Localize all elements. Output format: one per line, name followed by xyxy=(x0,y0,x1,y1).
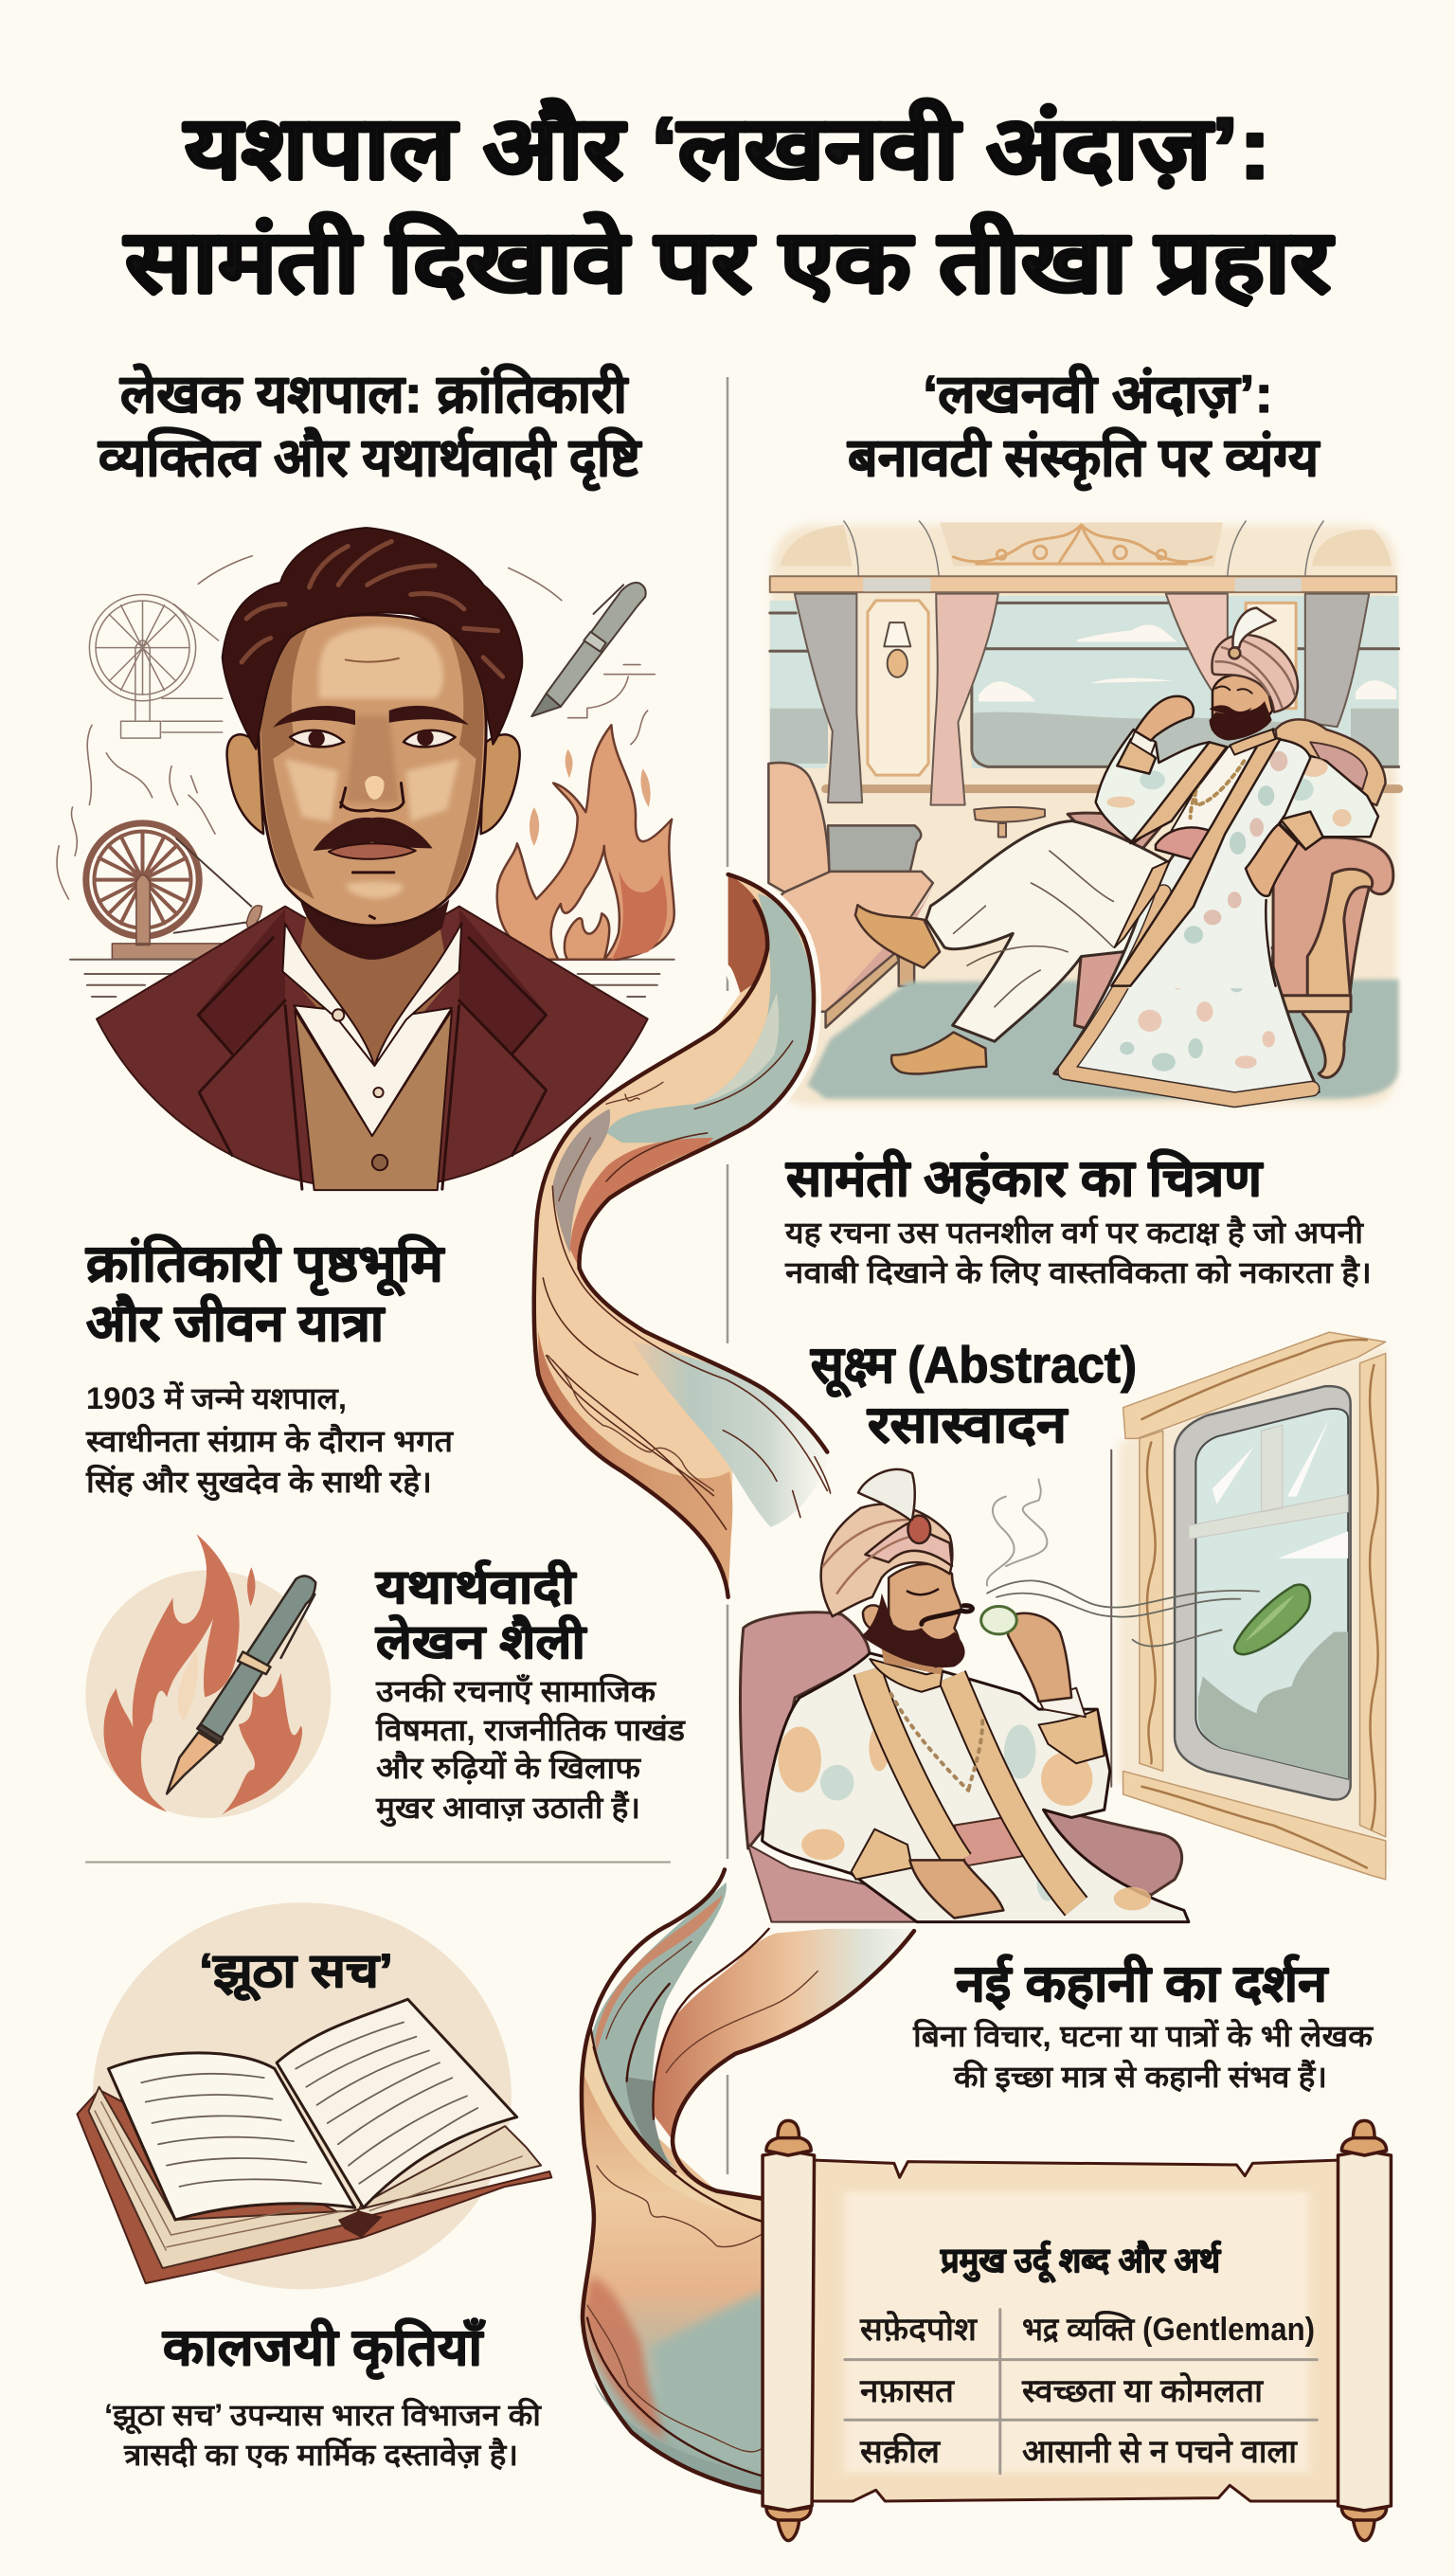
red lower arm stripe xyxy=(570,1138,713,1269)
table row 1 xyxy=(859,2310,1315,2348)
neck xyxy=(295,899,449,1073)
book cover xyxy=(77,2090,551,2283)
section: feudal ego: सामंती अहंकार का चित्रण xyxy=(785,1148,1264,1207)
section: revolutionary background: क्रांतिकारी पृष्ठभूमि xyxy=(85,1234,445,1296)
red strip xyxy=(595,1895,723,2051)
icon: line-art spinning wheel xyxy=(89,595,223,738)
chair crest xyxy=(1276,719,1386,805)
inside teal xyxy=(592,1882,727,2174)
side table xyxy=(974,807,1045,838)
section: abstract tasting heading xyxy=(810,1337,1137,1453)
left seat xyxy=(768,763,933,1028)
beige circle xyxy=(85,1570,331,1818)
raised hand xyxy=(1130,731,1156,755)
right roller xyxy=(1338,2120,1391,2541)
title xyxy=(123,99,1335,311)
curtains xyxy=(795,594,1369,805)
illustration: nawab upper body, turban and armrest hand xyxy=(1096,608,1386,988)
shoes xyxy=(855,905,986,1074)
ceiling arches xyxy=(844,521,1323,575)
section: realistic writing style: और रुढ़ियों के खिलाफ xyxy=(376,1750,641,1785)
section: revolutionary background xyxy=(85,1234,455,1502)
armchair xyxy=(1068,813,1393,1077)
left roller xyxy=(763,2120,815,2541)
section: revolutionary background: और जीवन यात्रा xyxy=(86,1293,386,1352)
neck xyxy=(879,1636,954,1674)
section: feudal ego: नवाबी दिखाने के लिए वास्तविकता को नकारता है। xyxy=(784,1254,1372,1289)
icon: pen xyxy=(531,583,646,716)
section: timeless works: ‘झूठा सच’ उपन्यास भारत विभाजन की xyxy=(104,2397,543,2435)
carriage wall xyxy=(1119,1345,1386,1867)
dark lower edge xyxy=(594,2382,780,2495)
section: revolutionary background: स्वाधीनता संग्राम के दौरान भगत xyxy=(85,1423,455,1458)
raised hand with cucumber slice xyxy=(1039,1688,1086,1717)
waistcoat xyxy=(295,1010,452,1190)
section: feudal ego xyxy=(784,1148,1372,1289)
luggage rail xyxy=(770,576,1396,592)
table row 2: स्वच्छता या कोमलता xyxy=(1021,2371,1264,2409)
red patch xyxy=(584,2279,666,2441)
heading: left column xyxy=(98,363,642,491)
chair armrest xyxy=(1025,1804,1182,1895)
window glass xyxy=(1175,1386,1351,1800)
section: realistic writing style: यथार्थवादी xyxy=(375,1559,577,1613)
ribbon body xyxy=(534,874,814,1597)
ribbon halo xyxy=(534,874,827,1597)
section: realistic writing style: विषमता, राजनीतिक पाखंड xyxy=(375,1712,686,1747)
face xyxy=(259,615,486,926)
illustration: nawab savouring the cucumber scent beside the window xyxy=(740,1332,1386,1922)
red brown fold xyxy=(728,874,766,993)
cucumber xyxy=(1234,1585,1310,1654)
lower hand xyxy=(909,1860,1003,1918)
ornament xyxy=(954,525,1212,564)
table row 1: भद्र व्यक्ति (Gentleman) xyxy=(1022,2310,1315,2348)
section: realistic writing style xyxy=(375,1559,686,1828)
section: revolutionary background: 1903 में जन्मे यशपाल, xyxy=(86,1380,347,1415)
shirt xyxy=(294,1005,452,1136)
label: Jhootha Sach: ‘झूठा सच’ xyxy=(199,1944,393,2001)
panel: Urdu glossary scroll xyxy=(763,2120,1391,2541)
heading: right column: बनावटी संस्कृति पर व्यंग्य xyxy=(847,426,1320,491)
teal sweep xyxy=(606,893,814,1143)
heading: left column: लेखक यशपाल: क्रांतिकारी xyxy=(119,363,630,423)
eyebrows xyxy=(273,706,469,728)
title: सामंती दिखावे पर एक तीखा प्रहार xyxy=(123,212,1335,311)
lower brown band xyxy=(538,1331,732,1597)
section: new story philosophy: बिना विचार, घटना या पात्रों के भी लेखक xyxy=(912,2018,1374,2053)
waist sash xyxy=(1156,827,1210,862)
section: abstract tasting heading: रसास्वादन xyxy=(867,1396,1069,1453)
section: new story philosophy xyxy=(912,1954,1374,2094)
text lines xyxy=(141,2022,477,2187)
section: realistic writing style: उनकी रचनाएँ सामाजिक xyxy=(375,1673,657,1708)
jacket xyxy=(97,907,648,1189)
wall lamp xyxy=(884,622,910,677)
hanging hand xyxy=(1246,824,1298,896)
rim xyxy=(582,2027,780,2223)
table row 3: आसानी से न पचने वाला xyxy=(1022,2432,1298,2470)
ribbon body xyxy=(580,2068,780,2495)
beard xyxy=(1210,701,1272,741)
beige circle xyxy=(93,1902,512,2289)
ribbon: flowing scroll upper segment xyxy=(534,874,831,1597)
turban xyxy=(821,1469,952,1616)
section: new story philosophy: की इच्छा मात्र से कहानी संभव हैं। xyxy=(953,2059,1327,2094)
parchment xyxy=(812,2160,1341,2501)
kurta front with necklace xyxy=(1172,739,1266,831)
ears xyxy=(227,734,520,834)
heading: right column: ‘लखनवी अंदाज़’: xyxy=(923,363,1273,423)
title: यशपाल और ‘लखनवी अंदाज़’: xyxy=(183,99,1271,197)
ribbon: flowing scroll lower segment xyxy=(580,1869,914,2495)
section: timeless works: त्रासदी का एक मार्मिक दस्तावेज़ है। xyxy=(123,2437,518,2472)
section: abstract tasting heading: सूक्ष्म (Abstract) xyxy=(810,1337,1137,1397)
floor xyxy=(807,980,1399,1099)
brocade coat xyxy=(763,1653,1189,1922)
illustration: portrait of Yashpal with charkha, pen and flame xyxy=(57,528,674,1190)
eyes xyxy=(290,730,456,747)
cuff and lapel xyxy=(1117,739,1323,850)
table row 1: सफ़ेदपोश xyxy=(859,2310,979,2348)
pen xyxy=(167,1576,315,1793)
left sleeve xyxy=(1096,730,1225,843)
illustration: pen and flame emblem xyxy=(85,1534,331,1818)
robe right edge line xyxy=(1266,900,1276,986)
teal tapered end xyxy=(632,1341,828,1527)
right arm of ribbon xyxy=(653,1929,914,2140)
ear xyxy=(863,1605,884,1631)
book spine xyxy=(338,2210,383,2238)
waist sash xyxy=(954,1815,1022,1865)
table row 3: सक़ील xyxy=(859,2432,942,2470)
scroll title: प्रमुख उर्दू शब्द और अर्थ xyxy=(940,2241,1222,2283)
trousers xyxy=(926,821,1173,1041)
section: revolutionary background: सिंह और सुखदेव के साथी रहे। xyxy=(85,1464,432,1502)
beard xyxy=(860,1594,965,1667)
turban xyxy=(1212,608,1298,712)
column divider xyxy=(727,377,728,2174)
table row 2: नफ़ासत xyxy=(859,2373,956,2409)
horizontal divider xyxy=(85,1861,671,1863)
outlines xyxy=(579,874,827,1452)
section: new story philosophy: नई कहानी का दर्शन xyxy=(955,1954,1329,2012)
windows xyxy=(972,596,1399,768)
necklace xyxy=(891,1694,982,1791)
face xyxy=(1212,675,1272,736)
section: timeless works: कालजयी कृतियाँ xyxy=(162,2317,486,2380)
flames xyxy=(103,1534,302,1815)
table row 3 xyxy=(859,2432,1298,2470)
section: timeless works xyxy=(104,2317,543,2472)
train wall xyxy=(771,525,1396,1106)
teal patch xyxy=(651,2288,774,2483)
table row 2 xyxy=(859,2371,1264,2409)
gold bands xyxy=(868,1670,1076,1906)
icon: wavy lines xyxy=(57,556,655,899)
outlines xyxy=(582,1869,780,2495)
moustache xyxy=(314,818,433,851)
window frame xyxy=(1123,1332,1386,1880)
purple shade xyxy=(552,1108,610,1253)
robe panel xyxy=(1127,739,1310,988)
hair xyxy=(223,528,522,749)
section: realistic writing style: मुखर आवाज़ उठाती हैं। xyxy=(375,1790,640,1828)
scent wisps xyxy=(987,1479,1047,1585)
heading: right column xyxy=(847,363,1320,491)
page block xyxy=(88,2087,541,2268)
ribbon halo xyxy=(582,1874,869,2495)
face xyxy=(889,1564,961,1666)
section: feudal ego: यह रचना उस पतनशील वर्ग पर कटाक्ष है जो अपनी xyxy=(784,1215,1365,1250)
gold robe border xyxy=(1111,736,1281,986)
pages xyxy=(108,2053,355,2220)
illustration: nawab lounging in train compartment xyxy=(768,521,1399,1106)
illustration: open book xyxy=(77,1902,551,2289)
heading: left column: व्यक्तित्व और यथार्थवादी दृष्टि xyxy=(98,426,642,491)
wall panel xyxy=(868,601,928,775)
robe with floral pattern xyxy=(1054,730,1333,1106)
table lines xyxy=(845,2310,1317,2474)
icon: brown spinning wheel xyxy=(86,823,251,936)
icon: flame xyxy=(497,725,674,960)
collar xyxy=(1230,730,1276,755)
chair back xyxy=(740,1612,870,1848)
section: realistic writing style: लेखन शैली xyxy=(375,1614,587,1668)
right sleeve xyxy=(1281,748,1378,850)
